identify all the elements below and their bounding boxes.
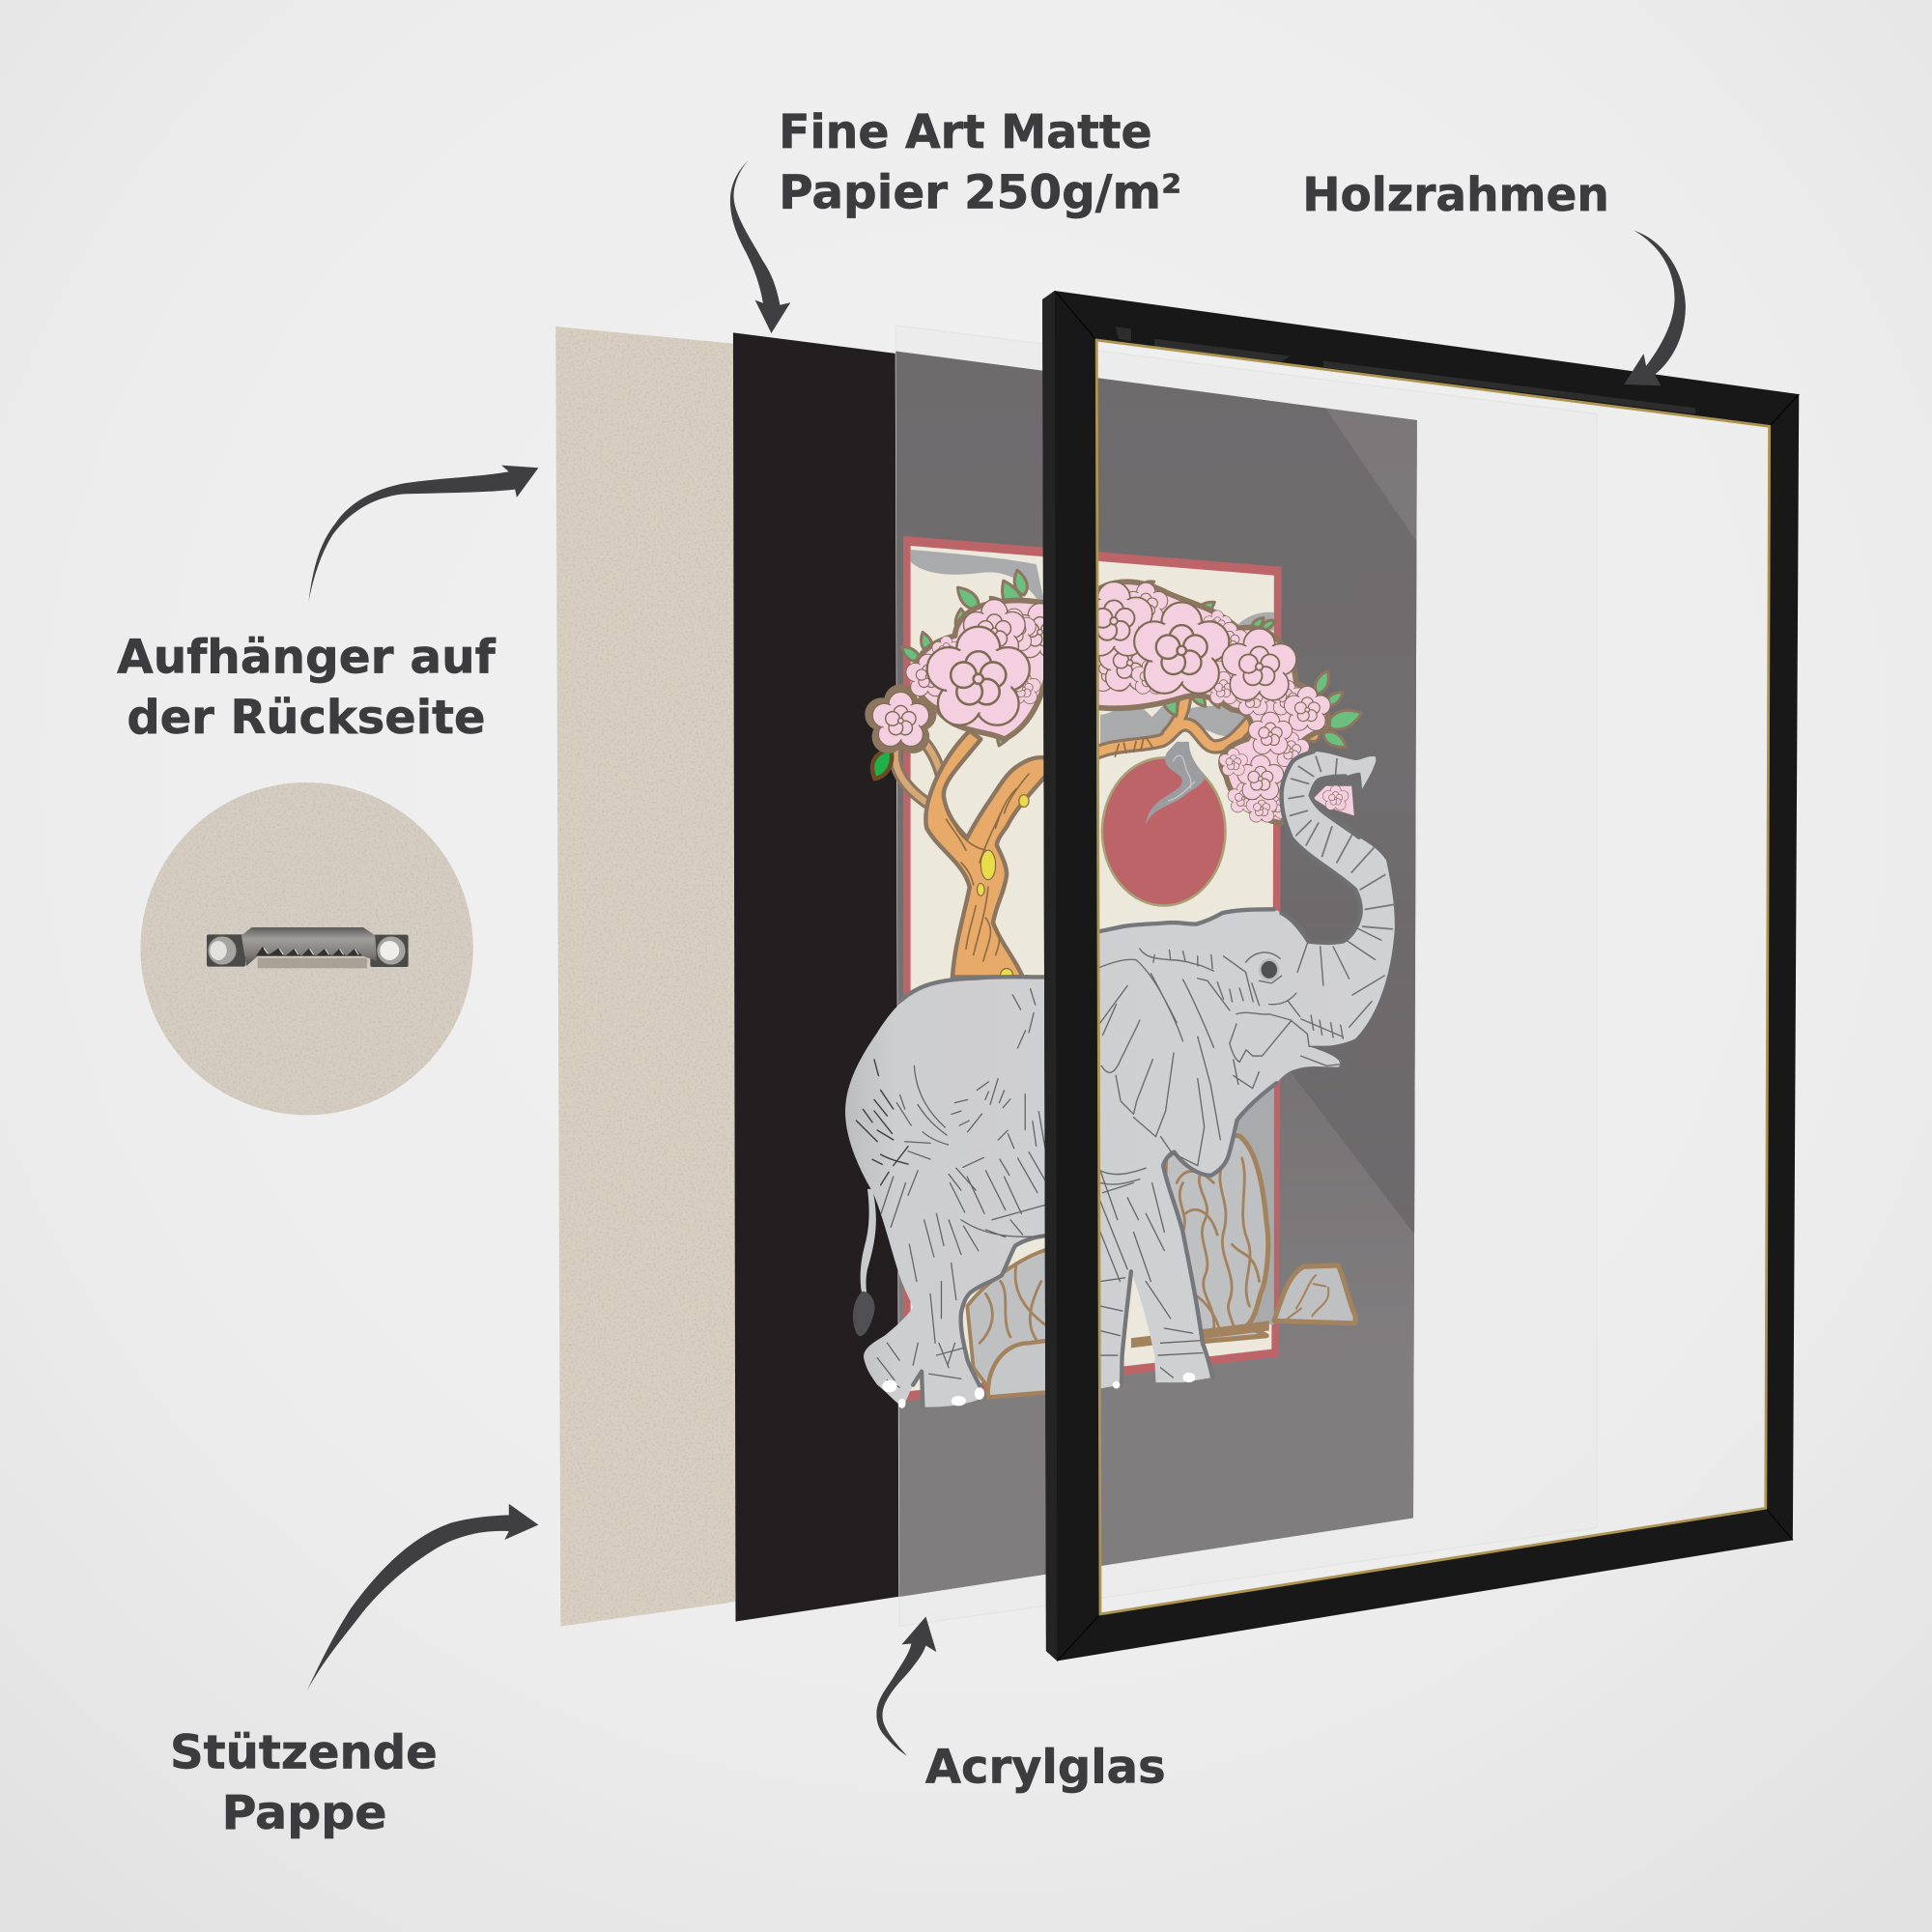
label: Stützende Pappe [170,1725,438,1840]
frame side bevel [1042,291,1057,1661]
left branches [895,739,941,806]
acrylic tint and outline [895,326,1597,1627]
eye [1259,958,1280,980]
label: Stützende Pappe: Stützende [170,1725,438,1779]
body wrinkles [877,988,1047,1387]
label: Fine Art Matte Papier [779,105,1181,220]
red sun [1102,757,1225,906]
label: Aufhänger auf der Rückseite [117,630,497,745]
trunk ridges [1289,756,1395,929]
label: Fine Art Matte Papier: Papier 250g/m² [779,166,1181,220]
elephant [845,752,1395,1408]
grey clouds [911,550,1274,1324]
smoke wisp [1146,742,1205,824]
left rock [967,1249,1047,1397]
detail circle: sawtooth hanger on cardboard [140,782,473,1115]
artwork print [845,536,1395,1408]
cream inner [911,546,1274,1391]
label: Stützende Pappe: Pappe [222,1786,387,1840]
mitre lines [1055,291,1799,1661]
top band reflections [1115,327,1695,414]
leaves [872,569,1365,779]
acrylic over paper [895,352,1417,1597]
arrow: to cardboard [307,1504,538,1691]
hanger wings [207,934,409,967]
glass shade above diagonal [1276,788,1417,1235]
toenails [882,1373,1195,1408]
rivet left [208,936,237,965]
trunk loop flower [1314,785,1354,815]
hanger [207,927,409,968]
hanger plate [242,927,377,966]
arrow: to wooden frame [1624,231,1686,385]
head and ear wrinkles [1100,927,1384,1193]
label: Fine Art Matte Papier: Fine Art Matte [779,105,1152,159]
label: Acrylglas: Acrylglas [925,1741,1166,1795]
elephant silhouette [845,752,1395,1407]
knots [980,850,996,880]
cardboard disc [140,782,473,1115]
blossom canopy masses [913,582,1328,823]
hanger teeth [256,947,362,956]
wooden frame [1042,291,1799,1661]
tail tuft [853,1292,875,1336]
gold inner edge [1096,340,1770,1614]
right rock [1158,1135,1268,1346]
right branch [1091,688,1314,761]
leg wrinkles [1100,1171,1203,1378]
bark lines [947,737,1152,961]
arrow: to matte paper [730,160,790,333]
trunk outline [1282,752,1361,943]
dark outline [900,909,1276,1407]
layer: supporting cardboard [555,327,735,1627]
hanger shadow [258,958,367,968]
frame body [1042,291,1799,1661]
tail [861,1189,876,1296]
label: Aufhänger auf der Rückseite: der Rückseite [127,691,486,745]
ground strip [1131,1321,1269,1348]
layer: black matte paper [733,332,1417,1622]
arrow: to hanger side of cardboard [308,466,538,602]
rivet right [377,936,406,965]
tree [895,688,1314,980]
blossoms halo for solo flower [865,684,937,753]
rocks [967,1135,1355,1397]
arrow: to acrylic glass [876,1616,936,1756]
rump hatching [856,1060,908,1185]
red border [903,536,1282,1401]
label: Aufhänger auf der Rückseite: Aufhänger auf [117,630,497,684]
glass reflection upper [1324,407,1417,542]
layer: acrylic glass sheet [895,326,1597,1627]
label: Holzrahmen: Holzrahmen [1302,168,1609,222]
small rock [1274,1265,1355,1323]
blossoms [872,582,1330,822]
trunk [925,730,1047,977]
